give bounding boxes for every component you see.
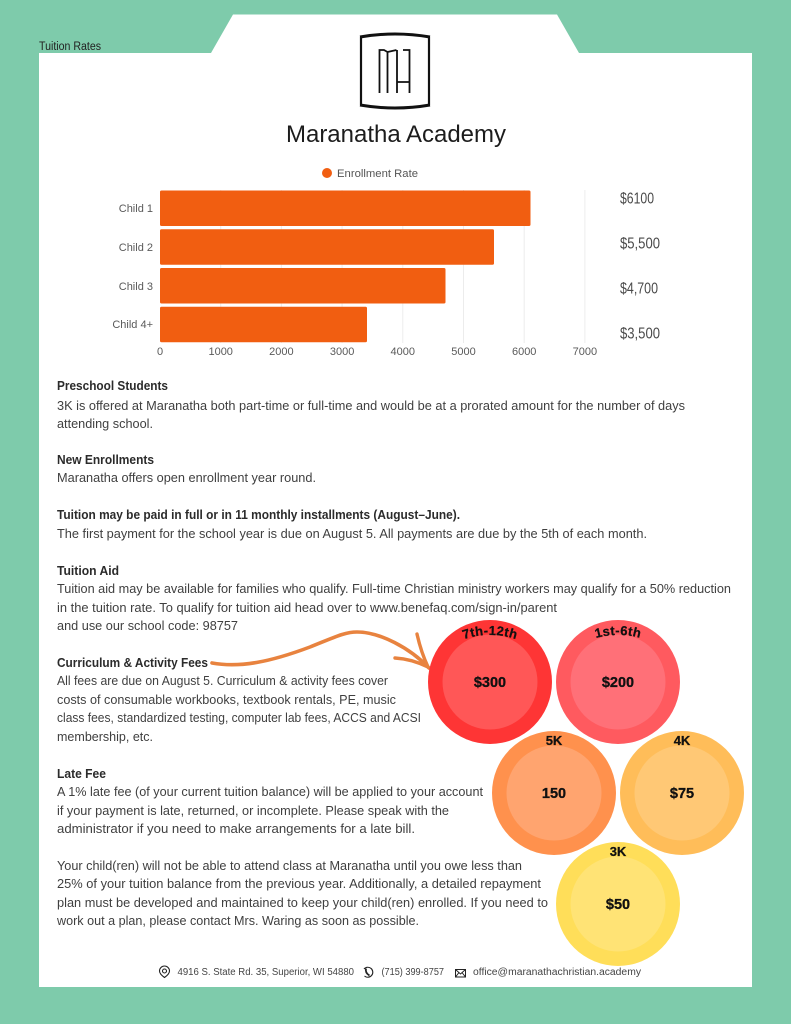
fee circle: 7th-12th: [428, 620, 552, 744]
text block: late fee: A 1% late fee (of your current tuition balance) will be applied to your account: [57, 784, 483, 799]
text block: payment schedule: [57, 507, 647, 541]
text block: late fee: [57, 766, 483, 836]
icon: location pin: [160, 966, 170, 978]
chart value labels: $3,500: [620, 326, 660, 342]
text block: late fee: if your payment is late, returned, or incomplete. Please speak with the: [57, 803, 449, 818]
fee circle: 3K: $50: [606, 897, 630, 913]
chart value labels: $6100: [620, 190, 654, 208]
text block: attendance and repayment: Your child(ren) will not be able to attend class at Maranatha until you owe less than: [57, 858, 522, 873]
fee circle: 3K: 3K: [610, 844, 627, 859]
chart axis labels: 3000: [330, 346, 354, 358]
chart axis labels: 7000: [573, 346, 597, 358]
text block: tuition aid: Tuition Aid: [57, 563, 119, 578]
fee circle: 7th-12th: $300: [474, 675, 506, 691]
fee circle: 5K: [492, 731, 616, 855]
text block: new enrollments: Maranatha offers open enrollment year round.: [57, 470, 316, 485]
chart value labels: [620, 190, 660, 342]
text block: preschool students: [57, 378, 685, 431]
chart axis labels: 6000: [512, 346, 536, 358]
text block: curriculum and activity fees: class fees, standardized testing, computer lab fees, ACCS and ACSI: [57, 710, 421, 725]
fee circle: 5K: 150: [542, 786, 566, 802]
footer phone: (715) 399-8757: [382, 967, 444, 978]
chart axis labels: 1000: [208, 346, 233, 358]
text block: curriculum and activity fees: Curriculum & Activity Fees: [57, 655, 208, 670]
icon: school logo: [360, 34, 430, 108]
chart bars: [160, 190, 530, 342]
text block: new enrollments: New Enrollments: [57, 452, 154, 467]
fee circle: 4K: 4K: [674, 733, 691, 748]
chart value labels: $4,700: [620, 280, 658, 298]
footer email: office@maranathachristian.academy: [473, 967, 641, 978]
chart category labels: Child 4+: [112, 319, 153, 331]
chart category labels: Child 3: [119, 281, 153, 293]
chart axis labels: 2000: [269, 346, 294, 358]
text block: tuition aid: Tuition aid may be available for families who qualify. Full-time Christian ministry workers may qualify for a 50% reduction: [57, 581, 731, 596]
text block: new enrollments: [57, 452, 316, 485]
chart category labels: Child 1: [119, 203, 153, 215]
chart axis labels: 5000: [451, 346, 476, 358]
chart axis labels: 4000: [391, 346, 415, 358]
text block: payment schedule: The first payment for the school year is due on August 5. All payments are due by the 5th of each month.: [57, 526, 647, 541]
text block: attendance and repayment: work out a plan, please contact Mrs. Waring as soon as possible.: [56, 913, 419, 928]
title: Maranatha Academy: [286, 121, 506, 148]
text block: preschool students: attending school.: [57, 416, 153, 431]
chart legend: Enrollment Rate: [337, 168, 418, 180]
footer contact line: [160, 966, 641, 978]
chart axis labels: 0: [157, 346, 163, 358]
icon: envelope: [456, 970, 466, 977]
chart category labels: Child 2: [119, 242, 153, 254]
fee circle: 1st-6th: $200: [602, 675, 634, 691]
fee circle: 5K: 5K: [546, 733, 563, 748]
tab label: Tuition Rates: Tuition Rates: [39, 41, 101, 53]
text block: attendance and repayment: [56, 858, 548, 928]
icon: phone: [364, 967, 373, 977]
text block: curriculum and activity fees: [57, 655, 421, 744]
fee circle: 4K: $75: [670, 786, 694, 802]
text block: preschool students: Preschool Students: [57, 378, 168, 393]
text block: late fee: administrator if you need to make arrangements for a late bill.: [57, 821, 415, 836]
fee circle: 3K: [556, 842, 680, 966]
arrow: fees to circles: [212, 632, 429, 668]
text block: attendance and repayment: 25% of your tuition balance from the previous year. Additionally, a detailed repayment: [57, 876, 541, 891]
text block: tuition aid: and use our school code: 98757: [57, 618, 238, 633]
fee circle: 4K: [620, 731, 744, 855]
chart axis labels: [157, 346, 597, 358]
fee circle: 1st-6th: [556, 620, 680, 744]
bar chart: enrollment rate: [112, 168, 660, 358]
text block: curriculum and activity fees: costs of consumable workbooks, textbook rentals, PE, music: [57, 692, 396, 707]
text block: curriculum and activity fees: membership, etc.: [57, 729, 153, 744]
footer address: 4916 S. State Rd. 35, Superior, WI 54880: [178, 967, 354, 978]
text block: tuition aid: [57, 563, 731, 633]
chart value labels: $5,500: [620, 236, 660, 252]
fee circle: 7th-12th: 7th-12th: [462, 626, 517, 639]
text block: tuition aid: in the tuition rate. To qualify for tuition aid head over to www.benefaq.com/sign-in/parent: [57, 600, 557, 615]
text block: preschool students: 3K is offered at Maranatha both part-time or full-time and would be at a prorated amount for the number of days: [57, 398, 685, 413]
text block: late fee: Late Fee: [57, 766, 106, 781]
chart category labels: [112, 203, 153, 331]
fee circle: 1st-6th: 1st-6th: [594, 626, 640, 638]
text block: curriculum and activity fees: All fees are due on August 5. Curriculum & activity fees cover: [57, 673, 389, 688]
text block: payment schedule: Tuition may be paid in full or in 11 monthly installments (August–June).: [57, 507, 460, 522]
text block: attendance and repayment: plan must be developed and maintained to keep your child(ren) enrolled. If you need to: [57, 895, 548, 910]
